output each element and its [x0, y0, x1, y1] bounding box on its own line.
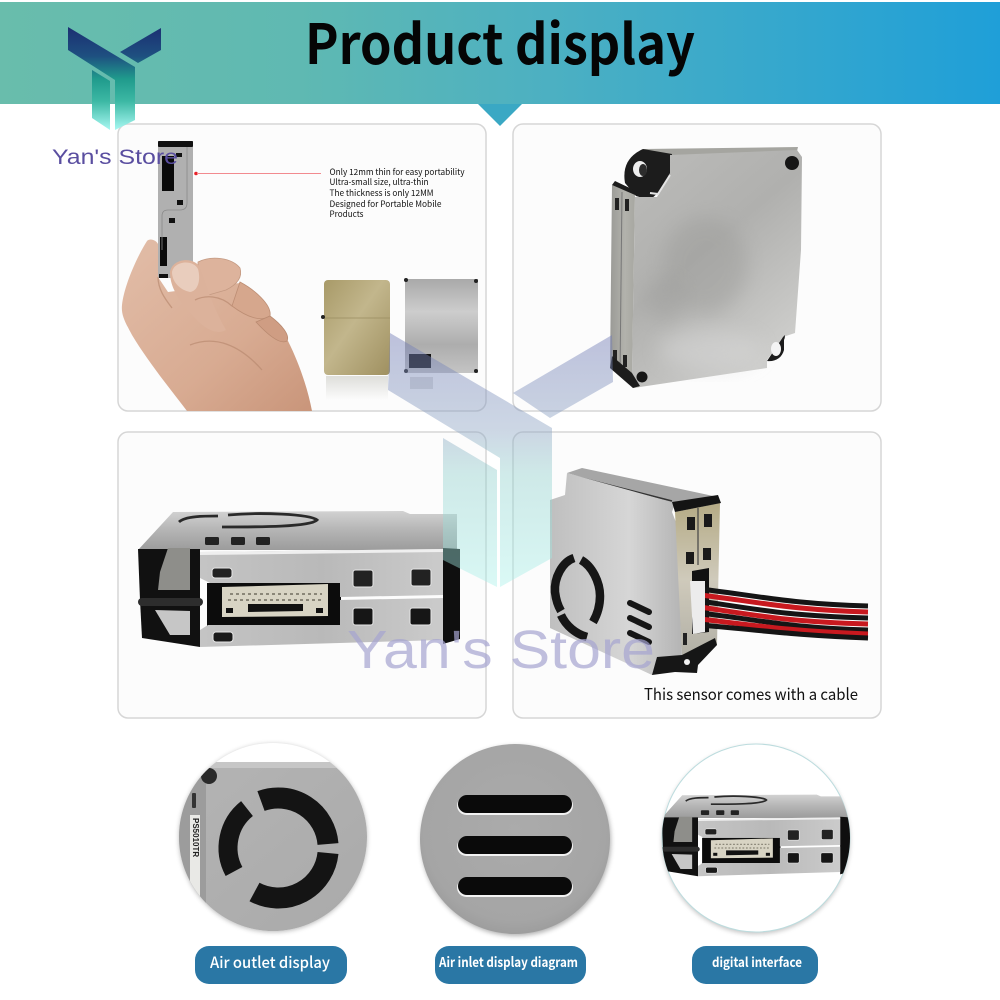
inlet slots — [457, 795, 573, 897]
thinness description: Only 12mm thin for easy portability — [330, 166, 465, 178]
sensor body — [610, 147, 802, 388]
header banner — [0, 2, 1000, 126]
detail circle: digital interface — [662, 744, 850, 934]
label: air inlet: Air inlet display diagram — [438, 951, 578, 971]
detail circle: air outlet: PS5010TR — [191, 818, 200, 857]
title: Product display — [305, 0, 695, 80]
hand — [122, 240, 312, 411]
panel: sensor rear view — [513, 124, 881, 411]
logo: store mark — [68, 27, 161, 130]
panel: sensor with cable — [513, 432, 881, 718]
panel: connector side view — [118, 432, 486, 718]
thinness description: Ultra-small size, ultra-thin — [330, 176, 428, 188]
label: digital interface — [692, 946, 818, 984]
sensor body with cable — [550, 468, 868, 675]
fan outlet — [555, 558, 600, 637]
watermark: store name: Yan's Store — [347, 620, 655, 680]
red pointer line — [194, 172, 321, 175]
ribbon cable — [700, 589, 868, 638]
thinness description — [330, 166, 465, 220]
thinness description: Products — [330, 208, 364, 220]
logo: store name: Yan's Store — [52, 146, 178, 169]
sensor edge held in hand — [158, 141, 193, 278]
label: air inlet — [435, 946, 586, 984]
detail circle: air inlet — [420, 744, 611, 936]
label: air outlet — [195, 946, 347, 984]
label: digital interface: digital interface — [712, 952, 802, 971]
watermark: central Y logo — [388, 333, 613, 587]
air outlet ring — [228, 798, 328, 898]
panel: thinness comparison — [118, 124, 486, 411]
thinness description: The thickness is only 12MM — [330, 187, 434, 199]
white connector — [690, 581, 705, 634]
thinness description: Designed for Portable Mobile — [330, 198, 442, 210]
cable caption: This sensor comes with a cable — [644, 681, 858, 705]
lighter — [321, 280, 390, 400]
inlet slots — [630, 603, 649, 642]
sensor connector view — [138, 511, 460, 647]
silver sensor plate — [404, 278, 478, 389]
label: air outlet: Air outlet display — [210, 951, 331, 973]
detail circle: air outlet — [176, 742, 370, 934]
